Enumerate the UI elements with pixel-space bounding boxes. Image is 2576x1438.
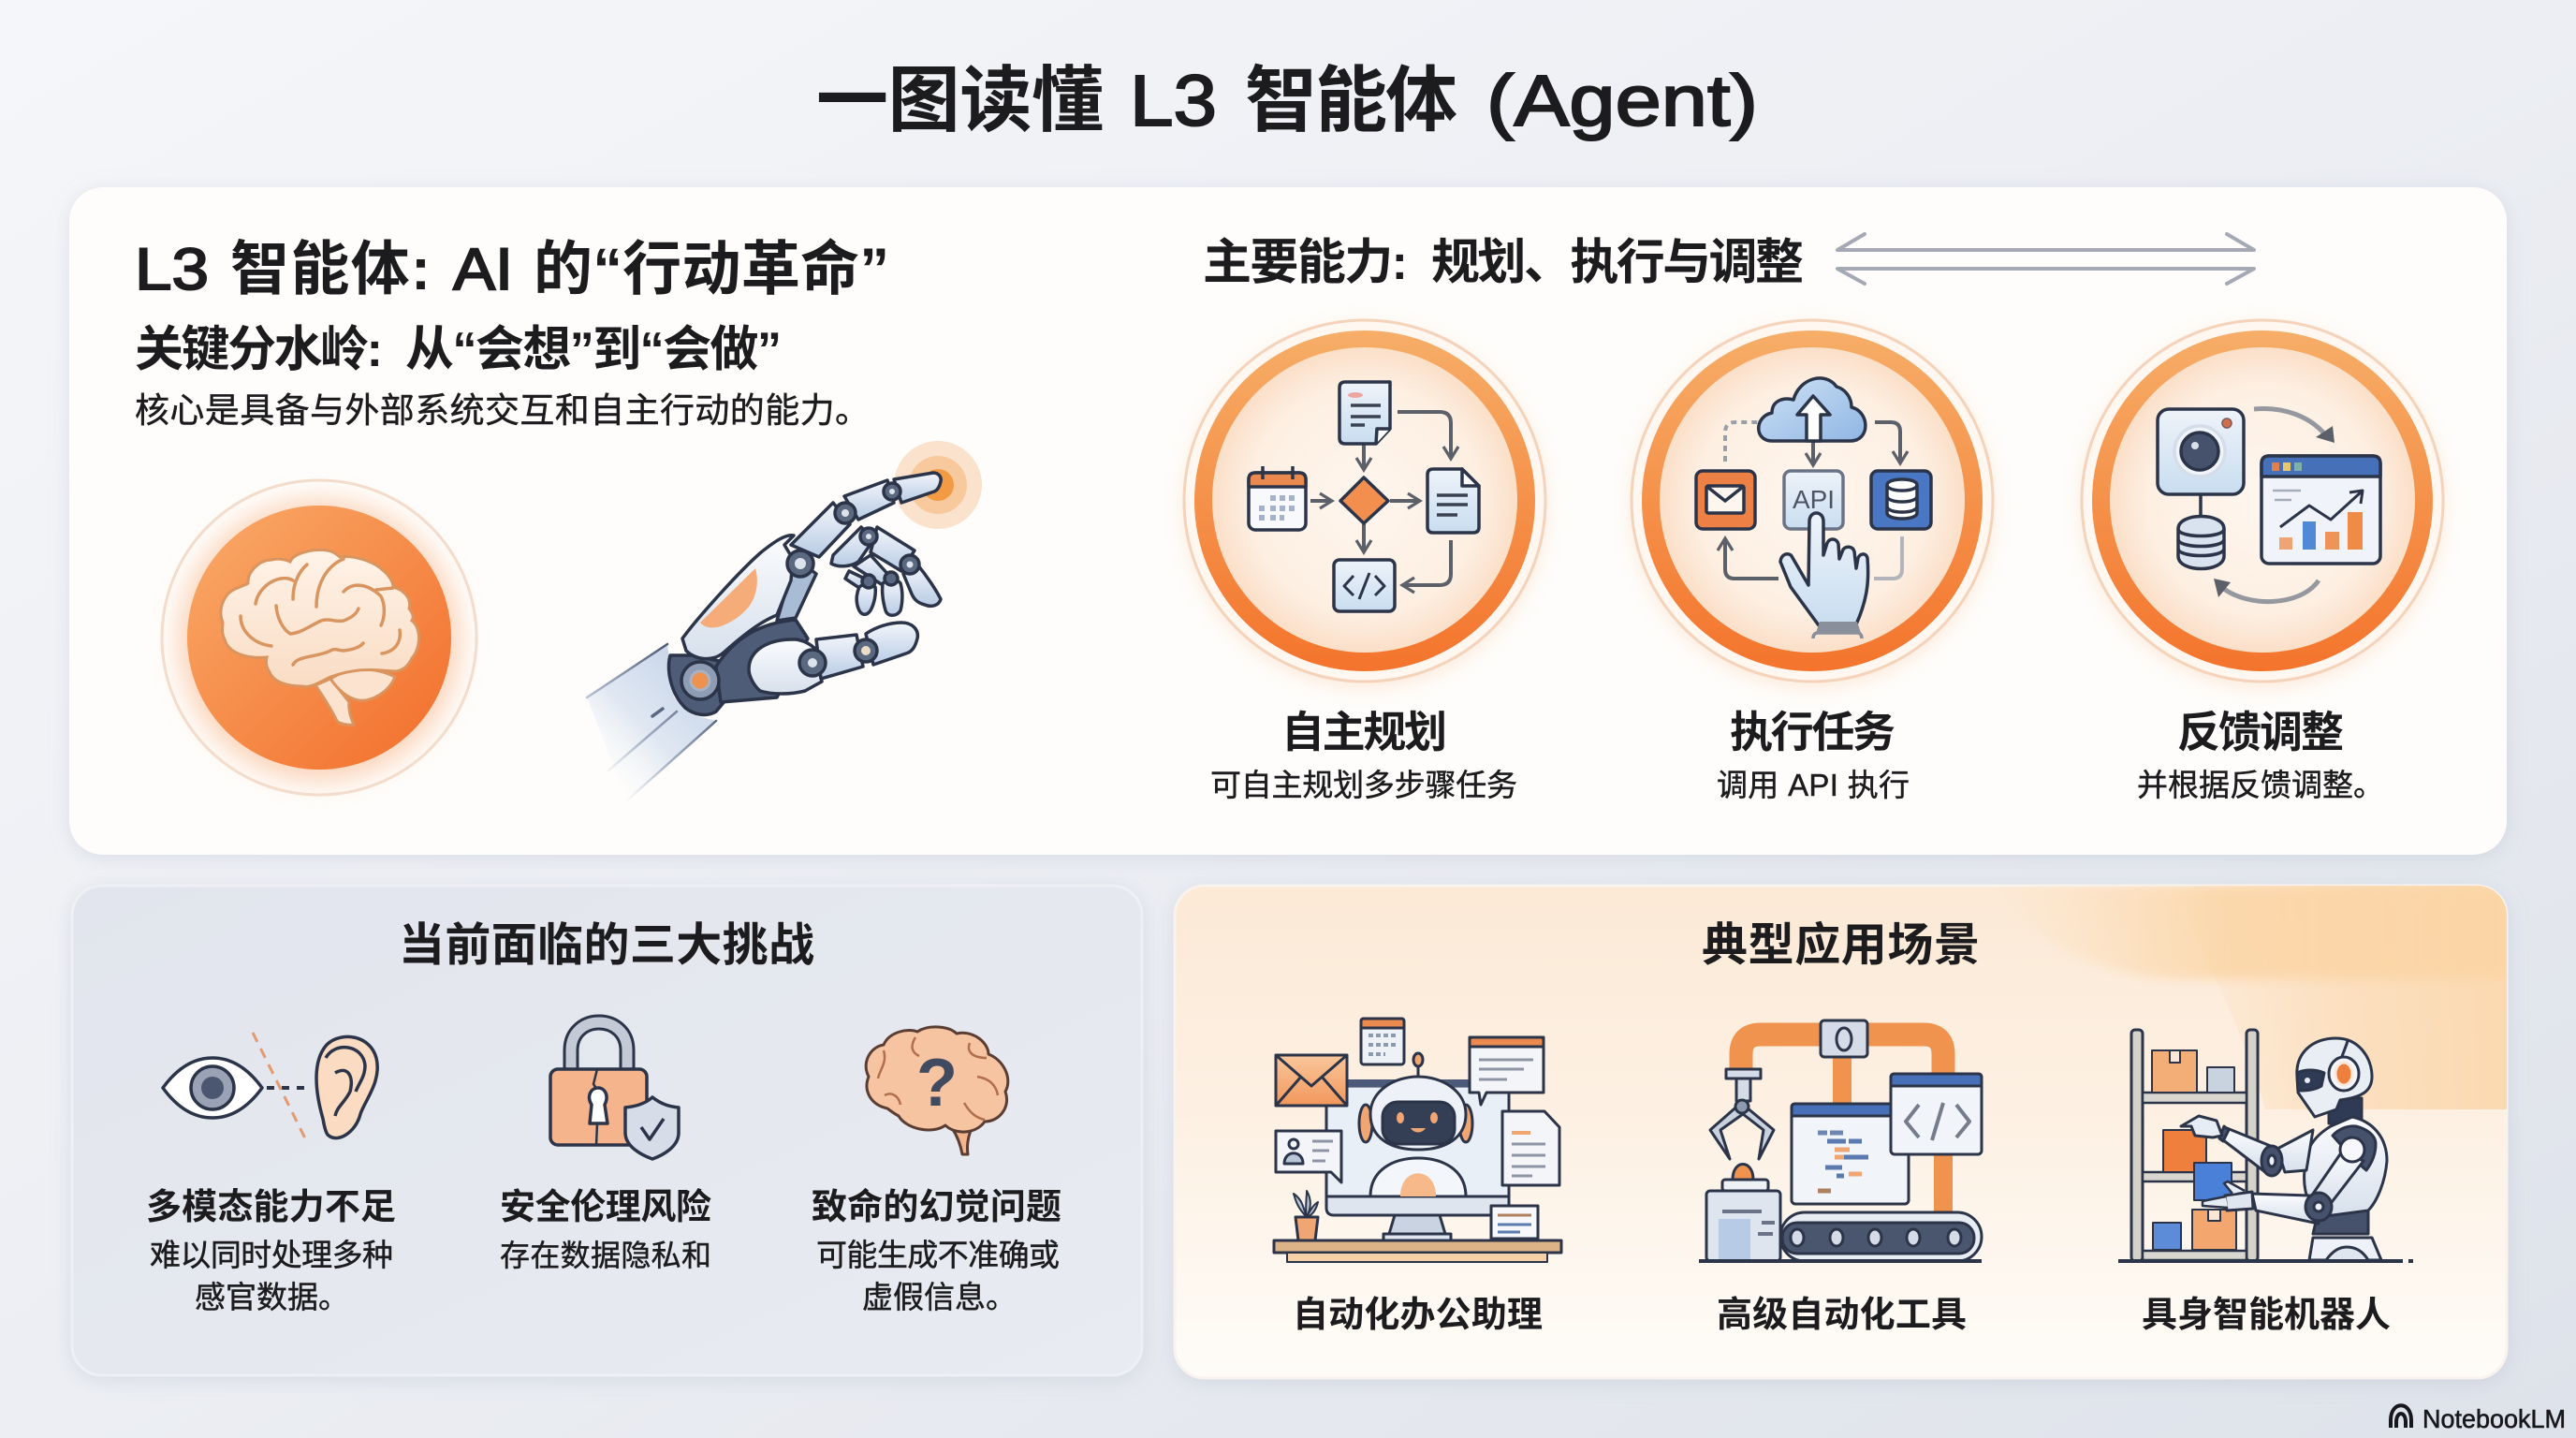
icon: API tools: API: [1793, 485, 1835, 514]
text: planning description: 可自主规划多步骤任务: [1210, 768, 1517, 802]
text: execute description: 调用 API 执行: [1717, 768, 1910, 802]
watermark: NotebookLM: NotebookLM: [2422, 1404, 2566, 1433]
heading: action revolution: AI: [453, 237, 513, 302]
scenario: office assistant: [1274, 1019, 1561, 1335]
icon: lock and shield: [550, 1022, 679, 1159]
heading: action revolution: L3: [135, 237, 209, 302]
icon: brain in orange circle: [162, 480, 476, 795]
label: hallucination: 致命的幻觉问题: [812, 1188, 1061, 1227]
text: multimodal description: 难以同时处理多种: [150, 1238, 393, 1272]
panel: three challenges: [72, 886, 1142, 1375]
capability: autonomous planning: [1184, 320, 1545, 802]
icon: robotic hand: [587, 473, 941, 800]
capability: feedback adjustment: [2082, 320, 2443, 802]
arrow: double arrow: [1837, 234, 2254, 284]
icon: API tools: [1696, 378, 1931, 638]
icon: eye and ear: [163, 1033, 377, 1144]
challenge: hallucination: [812, 1027, 1061, 1314]
label: office assistant: 自动化办公助理: [1293, 1296, 1543, 1335]
heading: action revolution: 智能体:: [230, 237, 431, 302]
heading: three challenges: 当前面临的三大挑战: [399, 920, 814, 971]
heading: main capabilities: 规划、执行与调整: [1431, 236, 1804, 290]
icon: office robot assistant: [1274, 1019, 1561, 1262]
capability: execute tasks: [1632, 320, 1993, 802]
heading: action revolution: 的“行动革命”: [534, 237, 889, 302]
title: 智能体: [1245, 61, 1457, 141]
label: automation tools: 高级自动化工具: [1717, 1296, 1967, 1335]
scenario: automation tools: [1699, 1020, 1982, 1335]
text: core description: 核心是具备与外部系统交互和自主行动的能力。: [135, 391, 870, 430]
text: feedback description: 并根据反馈调整。: [2137, 768, 2384, 802]
label: embodied robot: 具身智能机器人: [2142, 1296, 2391, 1335]
label: autonomous planning: 自主规划: [1281, 708, 1447, 756]
icon: industrial automation line: [1699, 1020, 1982, 1261]
icon: brain with question mark: ?: [916, 1046, 958, 1121]
subheading: key watershed: 关键分水岭:: [135, 323, 383, 377]
panel: L3 agent overview and capabilities: [69, 187, 2507, 855]
icon: planning flowchart: [1249, 382, 1479, 611]
challenge: multimodal: [146, 1033, 396, 1314]
label: multimodal: 多模态能力不足: [146, 1188, 396, 1227]
label: safety: 安全伦理风险: [500, 1188, 711, 1227]
icon: feedback monitoring: [2158, 409, 2380, 602]
title: (Agent): [1486, 61, 1758, 141]
icon: touch halo at fingertip: [894, 441, 982, 529]
icon: humanoid robot at shelf: [2118, 1030, 2413, 1261]
icon: brain with question mark: [866, 1027, 1008, 1154]
text: hallucination description: 虚假信息。: [862, 1280, 1017, 1314]
text: hallucination description: 可能生成不准确或: [816, 1238, 1060, 1272]
title: L3: [1130, 61, 1217, 141]
heading: application scenarios: 典型应用场景: [1702, 920, 1980, 971]
title: 一图读懂: [816, 61, 1104, 141]
panel: application scenarios: [1175, 886, 2509, 1378]
text: safety description: 存在数据隐私和: [500, 1239, 711, 1272]
text: multimodal description: 感官数据。: [195, 1280, 349, 1314]
heading: main capabilities: 主要能力:: [1203, 236, 1408, 290]
scenario: embodied robot: [2118, 1030, 2413, 1335]
label: feedback adjustment: 反馈调整: [2177, 708, 2344, 756]
challenge: safety: [500, 1022, 711, 1272]
label: execute tasks: 执行任务: [1730, 708, 1895, 756]
subheading: key watershed: 从“会想”到“会做”: [405, 323, 782, 377]
